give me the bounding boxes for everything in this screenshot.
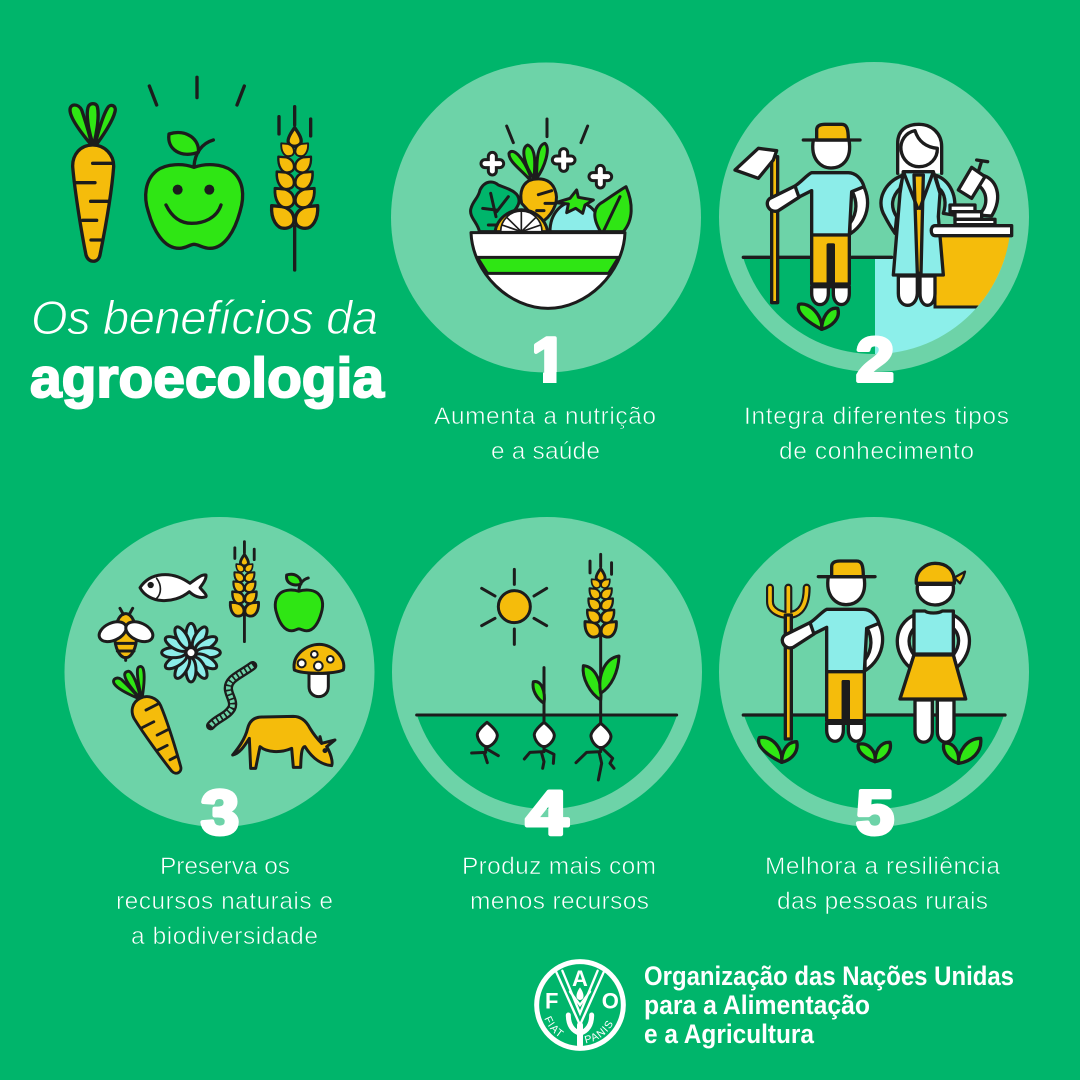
caption 1 [434, 403, 656, 465]
panel: benefit 4 [392, 517, 702, 915]
caption 1: e a saúde [491, 438, 600, 465]
caption 5: Melhora a resiliência [765, 853, 1000, 880]
circle 3 [64, 517, 374, 827]
organization name: para a Alimentação [644, 990, 870, 1020]
female farmer [897, 563, 969, 742]
sprout [524, 668, 554, 768]
caption 1: Aumenta a nutrição [434, 403, 656, 430]
illustration: biodiversity [96, 542, 344, 780]
illustration: sun and growing plants [417, 554, 677, 780]
number 4: 4 [526, 779, 569, 848]
logo: FAO: F [545, 988, 558, 1013]
logo: FAO: O [602, 988, 619, 1013]
caption 3: Preserva os [160, 853, 290, 880]
caption 2 [744, 403, 1009, 465]
caption 3 [116, 853, 333, 950]
panel: benefit 2 [719, 62, 1030, 465]
farmer [767, 124, 868, 305]
grown wheat plant [576, 554, 619, 780]
number 3: 3 [201, 779, 239, 848]
pitchfork [770, 588, 807, 739]
logo: FAO [534, 959, 626, 1051]
icon: smiling apple [146, 77, 244, 248]
soil [418, 716, 676, 809]
ground split: green and light blue [744, 237, 1010, 354]
scientist [881, 124, 955, 305]
wheat [230, 542, 259, 642]
caption 2: Integra diferentes tipos [744, 403, 1009, 430]
plants [759, 737, 981, 763]
circle 2 [719, 62, 1029, 372]
title: agroecologia [30, 346, 385, 409]
circle 4 [392, 517, 702, 827]
caption 4: Produz mais com [462, 853, 656, 880]
caption 5 [765, 853, 1000, 915]
bee [96, 608, 156, 660]
apple [275, 574, 323, 631]
icon: bowl of food [471, 119, 631, 308]
organization name: Organização das Nações Unidas [644, 961, 1014, 991]
fish [140, 575, 206, 601]
cow [233, 716, 335, 768]
logo: FAO: PANIS [584, 1020, 612, 1044]
hoe [735, 148, 778, 303]
icons: carrot, smiling apple and wheat [70, 77, 318, 270]
caption 4 [462, 853, 656, 915]
caption 2: de conhecimento [779, 438, 974, 465]
number 5: 5 [856, 779, 894, 848]
caption 3: a biodiversidade [131, 923, 318, 950]
male farmer [782, 561, 883, 741]
title [30, 291, 385, 409]
plant [798, 304, 838, 329]
circle 1 [391, 62, 701, 372]
number 2: 2 [856, 326, 894, 395]
logo: FAO: A [572, 966, 588, 991]
flower [162, 623, 220, 682]
title: Os benefícios da [31, 291, 378, 344]
seed [472, 722, 498, 763]
sun [482, 569, 547, 644]
panel: benefit 1 [391, 62, 701, 465]
microscope and desk [931, 160, 1012, 236]
organization name [644, 961, 1014, 1049]
carrot [112, 664, 192, 780]
caption 5: das pessoas rurais [777, 888, 988, 915]
icon: wheat [272, 107, 318, 270]
panel: benefit 3 [64, 517, 374, 950]
panel: benefit 5 [719, 517, 1030, 915]
worm [211, 666, 253, 726]
logo: FAO: FIAT [544, 1016, 564, 1036]
soil [744, 716, 1004, 808]
illustration: farmer and scientist [735, 124, 1012, 329]
caption 4: menos recursos [470, 888, 649, 915]
mushroom [294, 644, 344, 697]
number 1: 1 [532, 326, 566, 395]
caption 3: recursos naturais e [116, 888, 333, 915]
circle 5 [719, 517, 1029, 827]
illustration: farmers [743, 561, 1005, 763]
organization name: e a Agricultura [644, 1019, 815, 1049]
icon: carrot [70, 104, 115, 261]
